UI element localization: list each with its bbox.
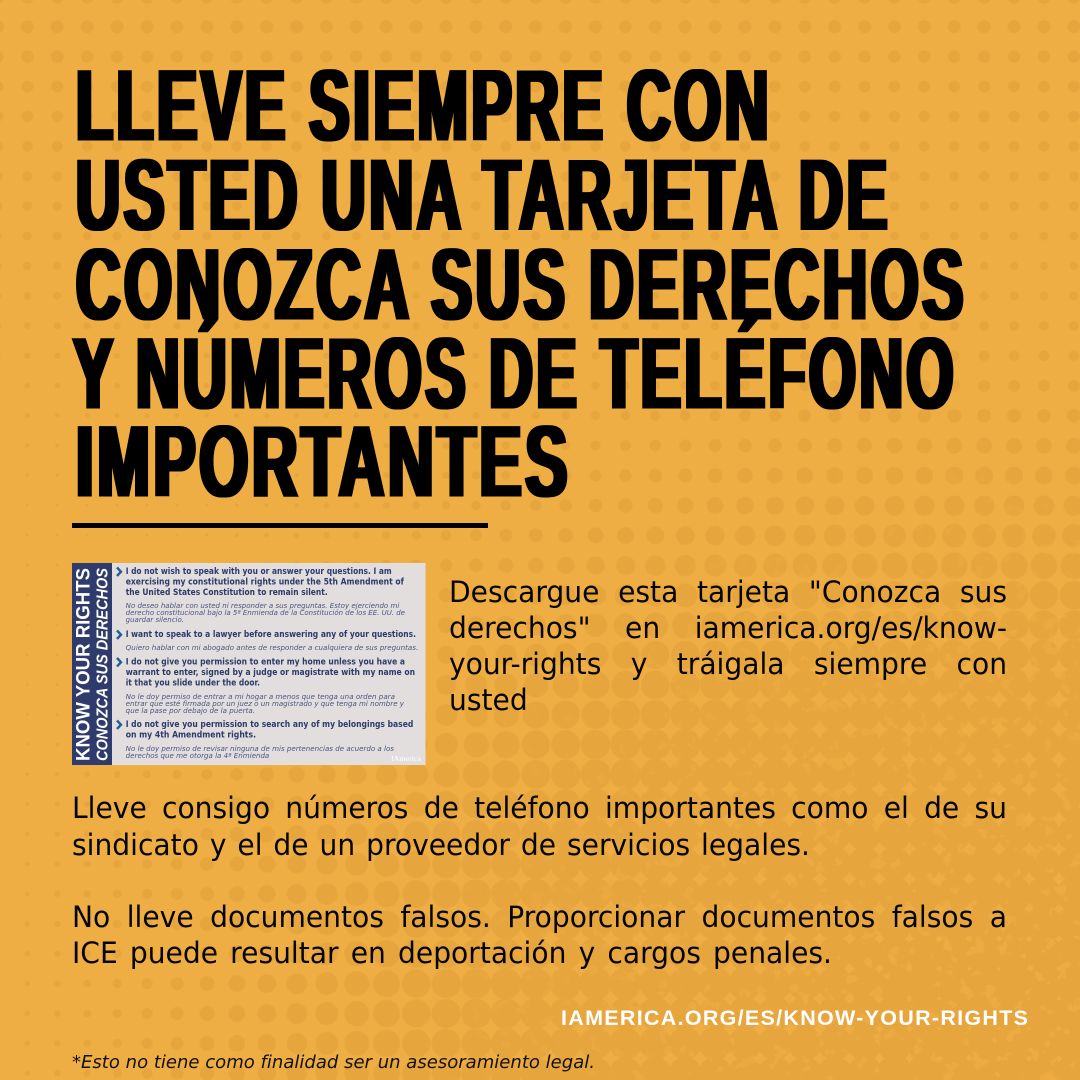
card logo: IAmerica <box>391 755 422 763</box>
card side band: CONOZCA SUS DERECHOS <box>95 568 112 761</box>
card Spanish statements: que la pase por debajo de la puerta. <box>126 707 255 715</box>
text block: download card: usted <box>449 683 528 717</box>
card Spanish statements: derechos que me otorga la 4ª Enmienda <box>126 752 269 760</box>
card Spanish statements: derecho constitucional bajo la 5ª Enmienda de la Constitución de los EE. UU. de <box>126 609 405 617</box>
card Spanish statements <box>126 602 418 760</box>
text block: phone numbers <box>72 791 1007 862</box>
card English statements: the United States Constitution to remain silent. <box>126 588 328 598</box>
card Spanish statements: entrar que esté firmada por un juez o un magistrado y que tenga mi nombre y <box>126 700 404 708</box>
card English statements: it that you slide under the door. <box>126 678 260 688</box>
card Spanish statements: Quiero hablar con mi abogado antes de responder a cualquiera de sus preguntas. <box>126 644 418 652</box>
text block: download card: derechos" en iamerica.org/es/know- <box>449 611 1007 645</box>
card English statements <box>126 567 416 740</box>
card Spanish statements: No deseo hablar con usted ni responder a sus preguntas. Estoy ejerciendo mi <box>126 602 399 610</box>
card English statements: I do not give you permission to enter my home unless you have a <box>126 658 405 668</box>
text block: download card: Descargue esta tarjeta "Conozca sus <box>449 575 1007 609</box>
website link: IAMERICA.ORG/ES/KNOW-YOUR-RIGHTS <box>561 1006 1028 1030</box>
text block: phone numbers: Lleve consigo números de teléfono importantes como el de su <box>72 791 1007 825</box>
text block: false documents: No lleve documentos falsos. Proporcionar documentos falsos a <box>72 900 1007 934</box>
card English statements: exercising my constitutional rights under the 5th Amendment of <box>126 578 404 588</box>
card side band: KNOW YOUR RIGHTS <box>72 568 94 761</box>
disclaimer: *Esto no tiene como finalidad ser un asesoramiento legal. <box>72 1052 595 1073</box>
card chevrons <box>117 568 121 729</box>
card Spanish statements: No le doy permiso de entrar a mi hogar a menos que tenga una orden para <box>126 693 395 701</box>
text block: false documents <box>72 900 1007 970</box>
text block: phone numbers: sindicato y el de un proveedor de servicios legales. <box>72 828 810 862</box>
text block: false documents: ICE puede resultar en deportación y cargos penales. <box>72 936 832 970</box>
title underline <box>72 523 488 528</box>
card background <box>72 563 426 765</box>
card English statements: I want to speak to a lawyer before answering any of your questions. <box>126 630 416 640</box>
card Spanish statements: guardar silencio. <box>126 616 184 624</box>
card side band <box>72 563 112 765</box>
card English statements: on my 4th Amendment rights. <box>126 730 256 740</box>
card English statements: warrant to enter, signed by a judge or magistrate with my name on <box>126 668 415 678</box>
text block: download card <box>449 575 1007 717</box>
card English statements: I do not wish to speak with you or answer your questions. I am <box>126 567 392 577</box>
card English statements: I do not give you permission to search any of my belongings based <box>126 720 413 730</box>
text block: download card: your-rights y tráigala siempre con <box>449 647 1007 681</box>
card Spanish statements: No le doy permiso de revisar ninguna de mis pertenencias de acuerdo a los <box>126 745 395 753</box>
title: IMPORTANTES <box>76 405 571 519</box>
